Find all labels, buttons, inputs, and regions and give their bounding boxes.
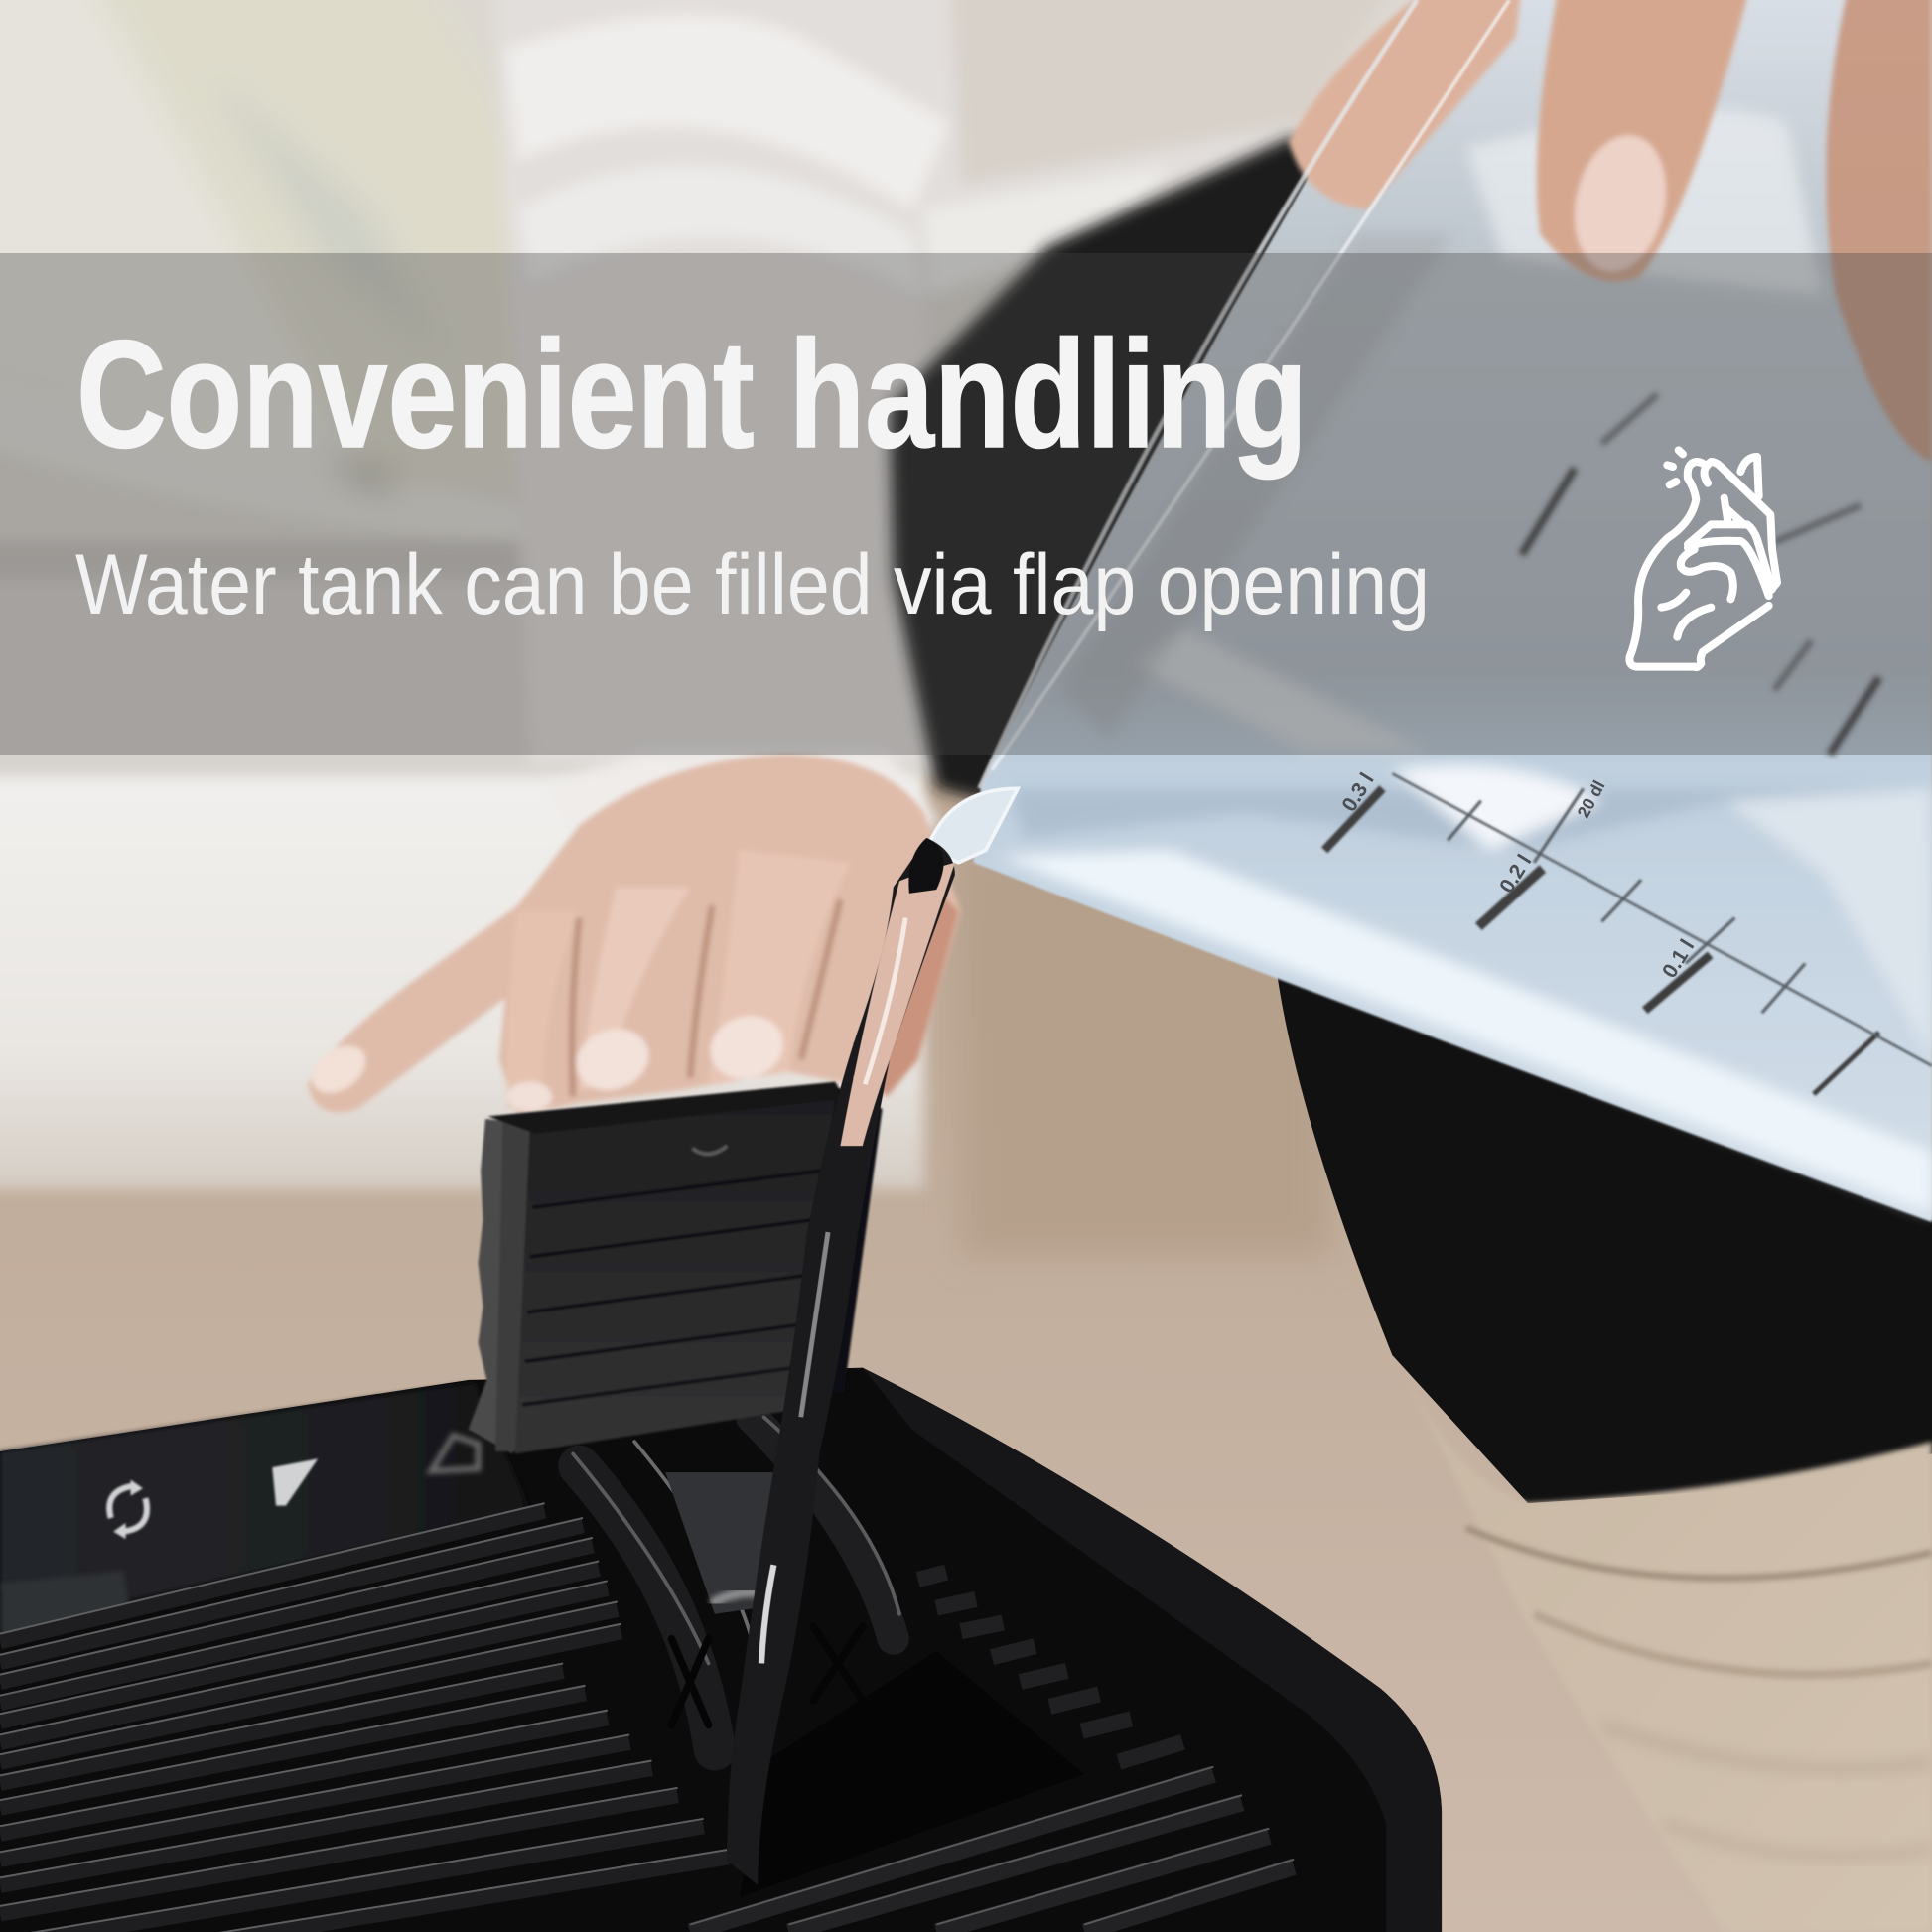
jug scale labels bbox=[1337, 769, 1699, 982]
jug scale labels: 0.3 l bbox=[1337, 769, 1379, 816]
icon: refresh control bbox=[109, 1480, 147, 1539]
icon: water control bbox=[431, 1436, 479, 1471]
hand on flap bbox=[304, 755, 961, 1115]
title: Convenient handling bbox=[76, 309, 1308, 480]
measuring jug body bbox=[926, 0, 1932, 1222]
centre curved supports bbox=[573, 1417, 899, 1749]
jug scale labels: 20 dl bbox=[1573, 777, 1609, 821]
fingers behind the jug bbox=[1289, 0, 1932, 462]
jug scale labels: 0.1 l bbox=[1658, 935, 1699, 982]
humidifier body bbox=[0, 1368, 1442, 1932]
pouring water stream bbox=[727, 838, 955, 1885]
jug graduation marks bbox=[1324, 394, 1932, 1094]
flap lid bbox=[469, 1082, 883, 1453]
water level streaks bbox=[998, 109, 1932, 1213]
jug scale labels: 0.2 l bbox=[1495, 851, 1537, 897]
icon: snapping fingers hand bbox=[1629, 450, 1777, 667]
translucent text band bbox=[0, 253, 1932, 755]
subtitle: Water tank can be filled via flap opening bbox=[75, 537, 1430, 632]
icon: fan speed control bbox=[272, 1458, 318, 1506]
control panel bbox=[0, 1382, 530, 1601]
jug pouring spout bbox=[926, 788, 1018, 863]
jug edge rim bbox=[992, 0, 1509, 770]
tank opening bbox=[740, 1651, 1084, 1897]
dark trousers upper bbox=[890, 136, 1368, 801]
air grille ribs right bbox=[690, 1573, 1294, 1932]
air grille ribs left bbox=[0, 1503, 728, 1932]
lower leg black trousers bbox=[1276, 961, 1932, 1503]
knit sock bbox=[1399, 1361, 1932, 1932]
knit sweater bbox=[492, 0, 1405, 763]
sleeve cuff bbox=[542, 752, 942, 888]
cushion bbox=[0, 0, 530, 486]
